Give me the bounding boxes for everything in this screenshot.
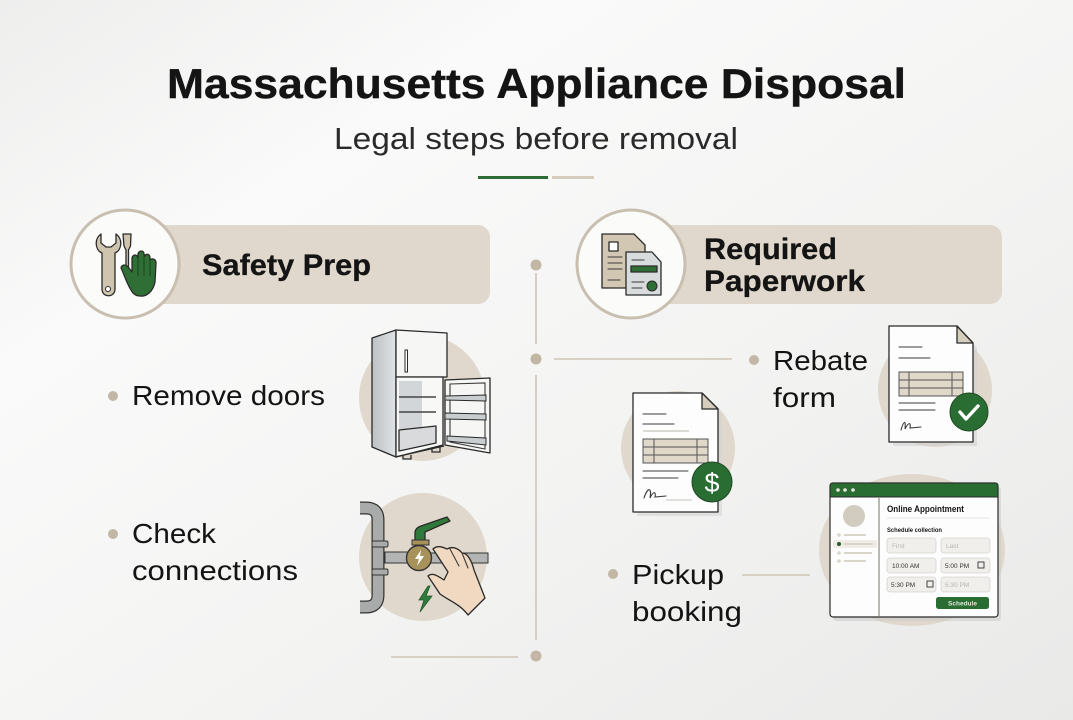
- subtitle: Legal steps before removal: [334, 122, 738, 156]
- illustration: online appointment window: [819, 474, 1005, 626]
- heading: required paperwork: Required: [704, 233, 837, 266]
- illustration: online appointment window: 5:30 PM: [945, 582, 969, 589]
- heading: required paperwork: Paperwork: [704, 265, 865, 298]
- illustration: online appointment window: 10:00 AM: [892, 563, 919, 570]
- icon: check badge: [950, 393, 988, 431]
- bullet: pickup booking: booking: [632, 596, 742, 627]
- illustration: online appointment window: 5:00 PM: [945, 563, 969, 570]
- bullet: rebate form: form: [773, 382, 836, 413]
- central connector timeline: [391, 260, 810, 662]
- icon: dollar badge: $: [704, 468, 720, 498]
- title: Massachusetts Appliance Disposal: [167, 60, 906, 107]
- bullet: rebate form: Rebate: [773, 345, 868, 376]
- bullet: pickup booking: [608, 559, 742, 627]
- bullet: check connections: connections: [132, 555, 298, 586]
- illustration: online appointment window: Online Appointment: [887, 504, 964, 514]
- illustration: online appointment window: Schedule: [948, 600, 977, 608]
- bullet: remove doors: Remove doors: [132, 380, 325, 411]
- title accent rule: [478, 176, 594, 179]
- icon: rebate document with dollar badge: [621, 391, 735, 516]
- bullet: rebate form: [749, 345, 868, 413]
- illustration: online appointment window: Last: [946, 543, 958, 550]
- heading: safety prep: Safety Prep: [202, 249, 371, 282]
- illustration: online appointment window: 5:30 PM: [891, 582, 915, 589]
- illustration: online appointment window: First: [892, 543, 905, 550]
- bullet: check connections: [108, 518, 298, 586]
- illustration: online appointment window: Schedule collection: [887, 527, 942, 534]
- panel: safety prep header: [71, 210, 490, 318]
- icon: wrench, screwdriver and hand: [96, 234, 156, 296]
- bullet: check connections: Check: [132, 518, 216, 549]
- panel: required paperwork header: [577, 210, 1002, 318]
- icon: valve and pipe with hand: [359, 493, 488, 621]
- icon: paperwork documents: [602, 234, 661, 295]
- bullet: pickup booking: Pickup: [632, 559, 724, 590]
- icon: open refrigerator: [359, 330, 490, 461]
- icon: rebate form with check badge: [878, 326, 992, 447]
